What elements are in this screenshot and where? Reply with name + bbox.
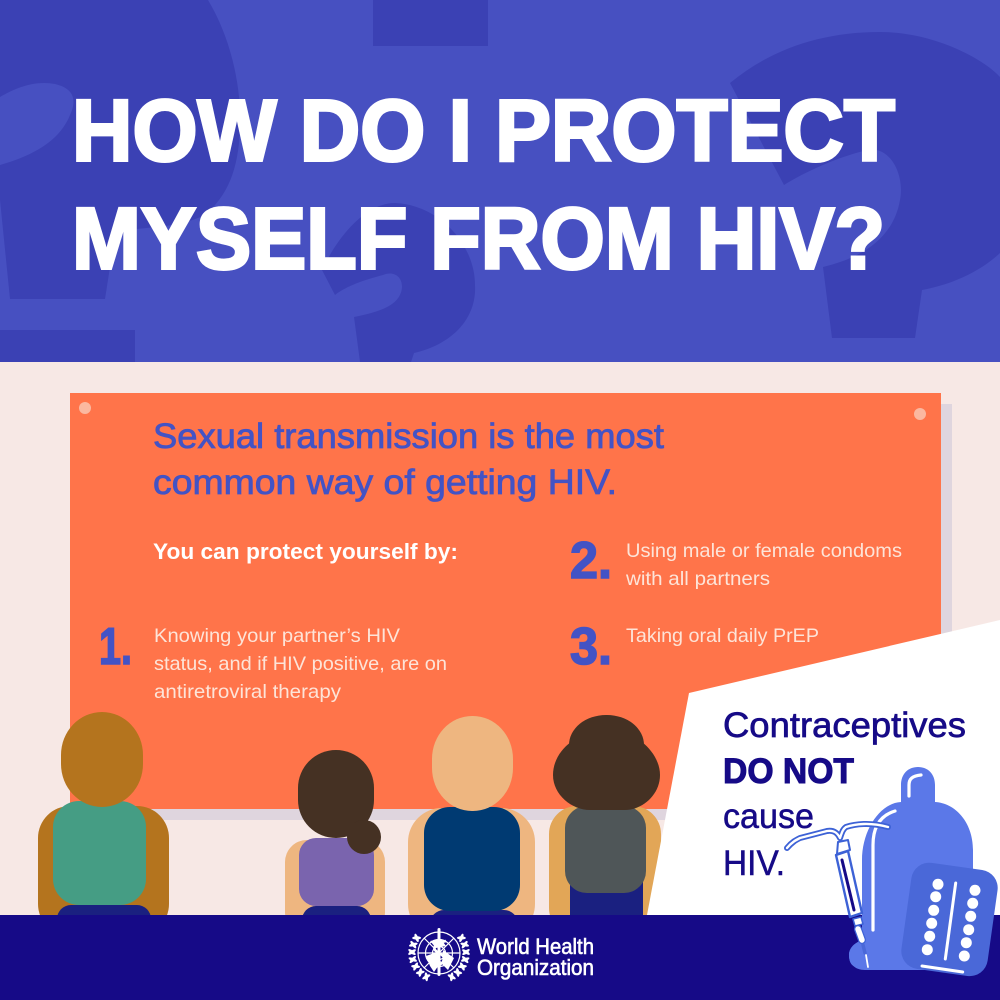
item 2: with all partners [625, 568, 770, 590]
organization name: World Health [477, 934, 594, 959]
person 4 [549, 715, 661, 936]
person 2 [285, 750, 385, 936]
icon: pill pack [899, 860, 1000, 978]
callout text: Contraceptives [723, 706, 966, 745]
WHO logo [407, 928, 594, 983]
board shadow [81, 404, 952, 820]
subheading: You can protect yourself by: [153, 539, 458, 564]
panel: orange board [70, 393, 941, 809]
callout text: cause [723, 797, 814, 836]
item 1: Knowing your partner’s HIV [154, 625, 400, 647]
organization name [477, 934, 594, 980]
callout text [723, 706, 966, 883]
item 1 [99, 618, 447, 703]
person 1 [38, 712, 169, 936]
heading: sexual transmission: common way of getting HIV. [153, 463, 617, 502]
item 1: 1. [99, 618, 132, 676]
item 2: 2. [570, 532, 612, 590]
emblem [407, 928, 471, 983]
person 3 [408, 716, 535, 940]
item 3: 3. [570, 618, 612, 676]
title: MYSELF FROM HIV? [72, 190, 885, 288]
heading: sexual transmission: Sexual transmission is the most [153, 417, 664, 456]
callout text: HIV. [723, 844, 785, 883]
icon: condom [849, 767, 973, 970]
heading: sexual transmission [153, 417, 664, 502]
panel: white callout [647, 620, 1000, 915]
item 2 [570, 532, 902, 590]
item 1: antiretroviral therapy [154, 681, 341, 703]
title: HOW DO I PROTECT [72, 82, 895, 180]
title [72, 82, 895, 288]
item 3: Taking oral daily PrEP [626, 625, 819, 647]
board pins [79, 402, 926, 420]
background question marks [0, 0, 1000, 362]
item 1: status, and if HIV positive, are on [154, 653, 447, 675]
header panel [0, 0, 1000, 362]
item 2: Using male or female condoms [626, 540, 902, 562]
organization name: Organization [477, 955, 594, 980]
item 3 [570, 618, 819, 676]
footer band [0, 915, 1000, 1000]
laurel wreath [407, 932, 471, 983]
icon: IUD [787, 824, 888, 967]
callout text: DO NOT [723, 752, 854, 791]
